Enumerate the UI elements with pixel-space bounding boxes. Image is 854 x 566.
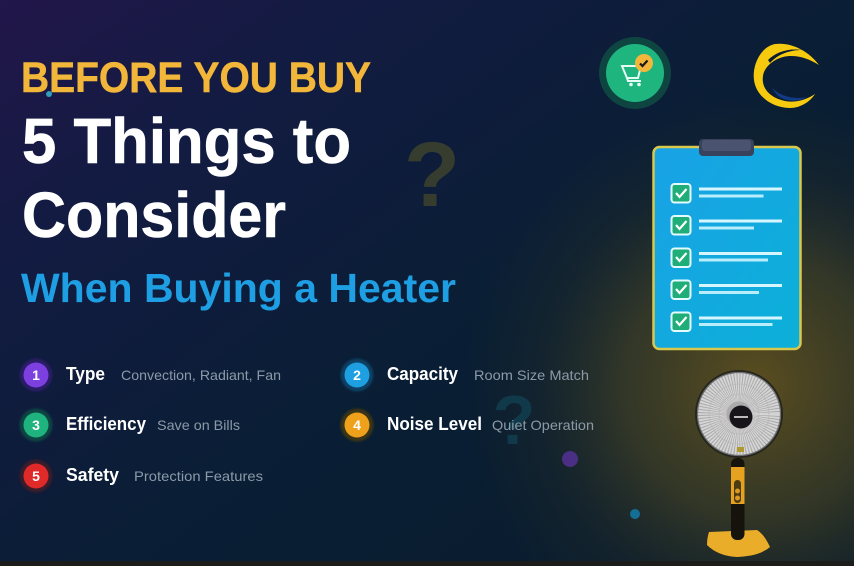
heading glitch mark bbox=[45, 62, 51, 92]
list item 3: efficiency: Efficiency bbox=[66, 414, 146, 434]
main title: 5 Things to bbox=[22, 105, 351, 177]
list item 2: capacity: Room Size Match bbox=[474, 367, 589, 383]
logo: crescent bbox=[754, 44, 819, 108]
icon: shopping cart badge bbox=[599, 37, 671, 109]
list item 4: noise level bbox=[340, 408, 594, 442]
list item 2: capacity: Capacity bbox=[387, 364, 458, 384]
list item 2: capacity bbox=[340, 358, 589, 392]
eyebrow heading: BEFORE YOU BUY bbox=[21, 54, 371, 102]
list item 5: safety: Safety bbox=[66, 465, 119, 485]
decorative dot: purple bbox=[562, 451, 578, 467]
list item 1: type: 1 bbox=[32, 367, 40, 383]
list item 3: efficiency bbox=[20, 408, 240, 442]
heater pole bbox=[731, 458, 744, 540]
main title bbox=[22, 105, 351, 251]
list item 3: efficiency: 3 bbox=[32, 417, 40, 433]
small teal accent behind heading bbox=[46, 91, 52, 97]
decorative question mark: upper: ? bbox=[404, 124, 460, 226]
decorative question mark: lower: ? bbox=[493, 381, 535, 459]
list item 1: type: Type bbox=[66, 364, 105, 384]
clipboard clip bbox=[699, 139, 754, 156]
heater hub bbox=[730, 406, 752, 428]
list item 5: safety: Protection Features bbox=[134, 468, 263, 484]
decorative dot: blue bbox=[630, 509, 640, 519]
heater controls bbox=[734, 480, 741, 503]
list item 4: noise level: 4 bbox=[353, 417, 361, 433]
main title: Consider bbox=[22, 179, 286, 251]
list item 2: capacity: 2 bbox=[353, 367, 361, 383]
heater bbox=[696, 371, 782, 557]
list item 1: type: Convection, Radiant, Fan bbox=[121, 367, 281, 383]
list item 1: type bbox=[20, 358, 281, 392]
checklist row 2 bbox=[672, 216, 782, 234]
list item 5: safety bbox=[20, 460, 263, 492]
checklist row 3 bbox=[672, 248, 782, 267]
list item 4: noise level: Quiet Operation bbox=[492, 417, 594, 433]
heater grille bbox=[696, 371, 782, 457]
heater base bbox=[707, 530, 770, 557]
checklist row 1 bbox=[672, 184, 782, 202]
clipboard bbox=[654, 139, 800, 349]
list item 3: efficiency: Save on Bills bbox=[157, 417, 240, 433]
checklist row 5 bbox=[672, 312, 782, 331]
checklist row 4 bbox=[672, 280, 782, 299]
subtitle: When Buying a Heater bbox=[21, 265, 456, 311]
list item 4: noise level: Noise Level bbox=[387, 414, 482, 434]
list item 5: safety: 5 bbox=[32, 468, 40, 484]
